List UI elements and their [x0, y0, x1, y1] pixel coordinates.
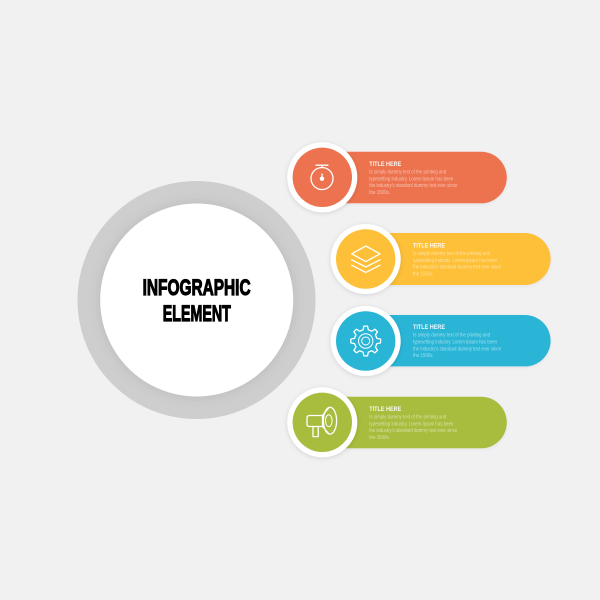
- text block: orange: typesetting industry. Lorem Ipsum has been: [369, 176, 453, 182]
- text block: blue: TITLE HERE: [413, 324, 446, 331]
- panel: blue item: [331, 306, 551, 376]
- text block: green: the industry's standard dummy text ever since: [369, 428, 457, 434]
- text block: yellow: the 1500s.: [413, 272, 434, 278]
- main title: INFOGRAPHIC: [143, 275, 251, 300]
- orange pill: [322, 152, 507, 203]
- text block: blue: Is simply dummy text of the printing and: [413, 333, 490, 339]
- text block: green: the 1500s.: [369, 435, 390, 441]
- icon: megaphone: [307, 407, 337, 437]
- icon: gear: [351, 326, 381, 356]
- main title: ELEMENT: [163, 301, 231, 326]
- text block: blue: [413, 324, 501, 359]
- main title: [143, 275, 251, 326]
- panel: orange item: [287, 142, 507, 212]
- text block: yellow: [413, 242, 501, 278]
- icon: layers: [352, 246, 380, 272]
- text block: yellow: Is simply dummy text of the printing and: [413, 251, 490, 257]
- icon: stopwatch: [311, 165, 333, 190]
- white inner disc: [100, 204, 293, 396]
- green badge: [287, 387, 357, 457]
- text block: green: TITLE HERE: [369, 406, 402, 413]
- text block: blue: the industry's standard dummy text ever since: [413, 346, 501, 352]
- text block: blue: the 1500s.: [413, 353, 434, 359]
- text block: green: typesetting industry. Lorem Ipsum has been: [369, 421, 453, 427]
- text block: blue: typesetting industry. Lorem Ipsum has been: [413, 340, 497, 346]
- blue pill: [366, 315, 551, 366]
- text block: orange: Is simply dummy text of the printing and: [369, 169, 446, 175]
- yellow badge: [331, 224, 401, 294]
- central circle: [78, 181, 316, 419]
- yellow pill: [366, 233, 551, 285]
- text block: yellow: TITLE HERE: [413, 242, 446, 249]
- text block: orange: the 1500s.: [369, 190, 390, 196]
- text block: yellow: the industry's standard dummy text ever since: [413, 265, 501, 271]
- text block: yellow: typesetting industry. Lorem Ipsum has been: [413, 258, 497, 264]
- text block: orange: TITLE HERE: [369, 161, 402, 168]
- text block: orange: the industry's standard dummy text ever since: [369, 183, 457, 189]
- green pill: [322, 397, 507, 448]
- grey outer ring: [78, 181, 316, 419]
- panel: green item: [287, 387, 507, 457]
- panel: yellow item: [331, 224, 551, 294]
- blue badge: [331, 306, 401, 376]
- text block: green: [369, 406, 457, 441]
- orange badge: [287, 142, 357, 212]
- text block: green: Is simply dummy text of the printing and: [369, 414, 446, 420]
- text block: orange: [369, 161, 457, 196]
